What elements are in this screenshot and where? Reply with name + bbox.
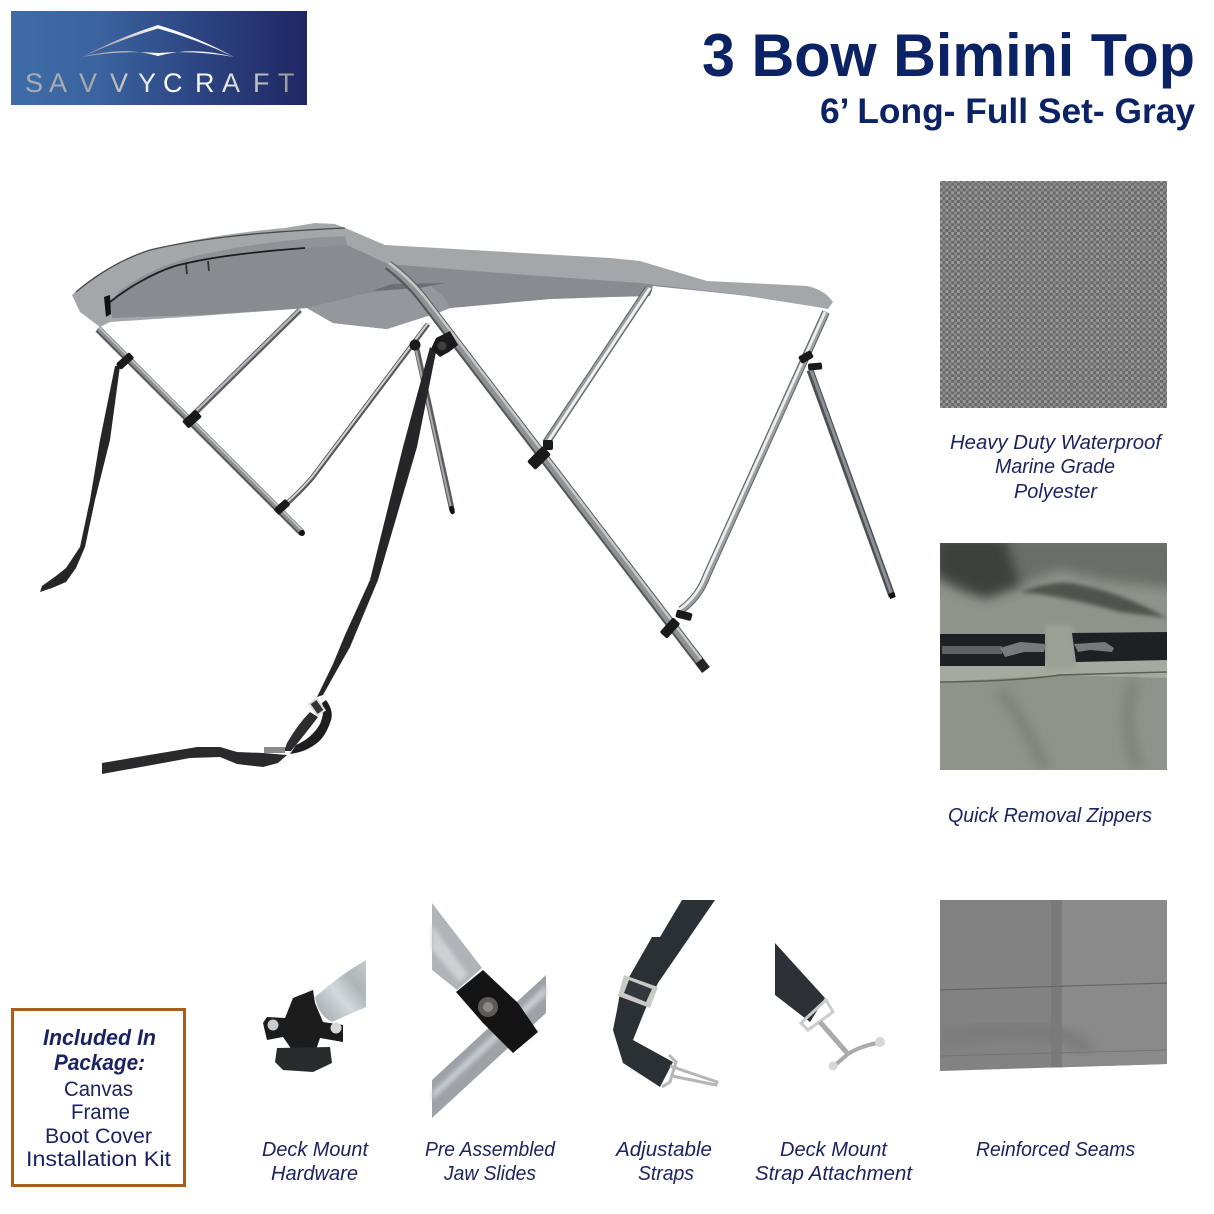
strap tail bbox=[102, 747, 287, 774]
rear bow tube bbox=[680, 312, 826, 610]
logo: Savvycraft bbox=[11, 11, 307, 105]
caption: deck mount hardware bbox=[262, 1139, 369, 1185]
caption: fabric bbox=[950, 432, 1163, 503]
caption: deck mount hardware: Hardware bbox=[271, 1163, 358, 1185]
center strap bbox=[317, 347, 436, 697]
caption: deck mount hardware: Deck Mount bbox=[262, 1139, 369, 1161]
caption: zippers: Quick Removal Zippers bbox=[948, 805, 1152, 827]
caption: jaw slides: Pre Assembled bbox=[425, 1139, 556, 1161]
subtitle: 6’ Long- Full Set- Gray bbox=[820, 92, 1196, 131]
left tube joints bbox=[116, 340, 420, 515]
panel: included in package: Installation Kit bbox=[26, 1148, 171, 1171]
photo: reinforced seams bbox=[940, 900, 1167, 1072]
panel: included in package: Package: bbox=[54, 1050, 145, 1075]
caption: strap attachment: Deck Mount bbox=[780, 1139, 888, 1161]
far bow tube bbox=[285, 323, 428, 505]
front left bow tube bbox=[98, 327, 305, 536]
caption: fabric: Heavy Duty Waterproof bbox=[950, 432, 1163, 454]
canvas fold bbox=[372, 283, 445, 291]
canvas silhouette bbox=[72, 223, 833, 329]
canvas edge bindings bbox=[76, 228, 345, 317]
center front tube bbox=[388, 263, 707, 670]
photo: strap attachment bbox=[775, 943, 885, 1070]
caption: adjustable straps bbox=[615, 1139, 712, 1185]
caption: strap attachment: Strap Attachment bbox=[755, 1163, 913, 1185]
caption: fabric: Marine Grade bbox=[995, 456, 1115, 478]
panel: included in package: Frame bbox=[71, 1101, 130, 1124]
caption: adjustable straps: Adjustable bbox=[615, 1139, 712, 1161]
panel: included in package bbox=[12, 1010, 184, 1186]
left strut bbox=[193, 309, 300, 415]
center strut bbox=[546, 288, 650, 443]
panel: included in package: Included In bbox=[43, 1025, 156, 1050]
caption: strap attachment bbox=[755, 1139, 913, 1185]
main product photo: bimini top bbox=[40, 223, 893, 774]
caption: jaw slides: Jaw Slides bbox=[443, 1163, 536, 1185]
photo: adjustable straps bbox=[613, 900, 717, 1087]
center joints bbox=[431, 331, 822, 639]
photo: jaw slides bbox=[432, 903, 546, 1118]
swatch: polyester fabric bbox=[940, 181, 1167, 408]
canvas lighter underside panel bbox=[307, 285, 450, 329]
photo: zippers bbox=[940, 543, 1167, 770]
photo: deck mount hardware bbox=[263, 960, 366, 1072]
caption: jaw slides bbox=[425, 1139, 556, 1185]
panel: included in package: Boot Cover bbox=[45, 1125, 152, 1148]
strap loop and buckle bbox=[264, 699, 332, 754]
caption: reinforced seams: Reinforced Seams bbox=[976, 1139, 1135, 1161]
logo: Savvycraft: SAVVYCRAFT bbox=[25, 68, 294, 98]
caption: fabric: Polyester bbox=[1014, 481, 1098, 503]
rear right leg bbox=[810, 370, 893, 598]
panel: included in package: Canvas bbox=[64, 1078, 133, 1101]
caption: adjustable straps: Straps bbox=[638, 1163, 694, 1185]
canvas upper band bbox=[112, 236, 347, 300]
title: 3 Bow Bimini Top bbox=[702, 22, 1195, 89]
left rear strap bbox=[40, 366, 120, 592]
canvas underside bbox=[110, 245, 760, 329]
rear left leg bbox=[416, 350, 452, 512]
